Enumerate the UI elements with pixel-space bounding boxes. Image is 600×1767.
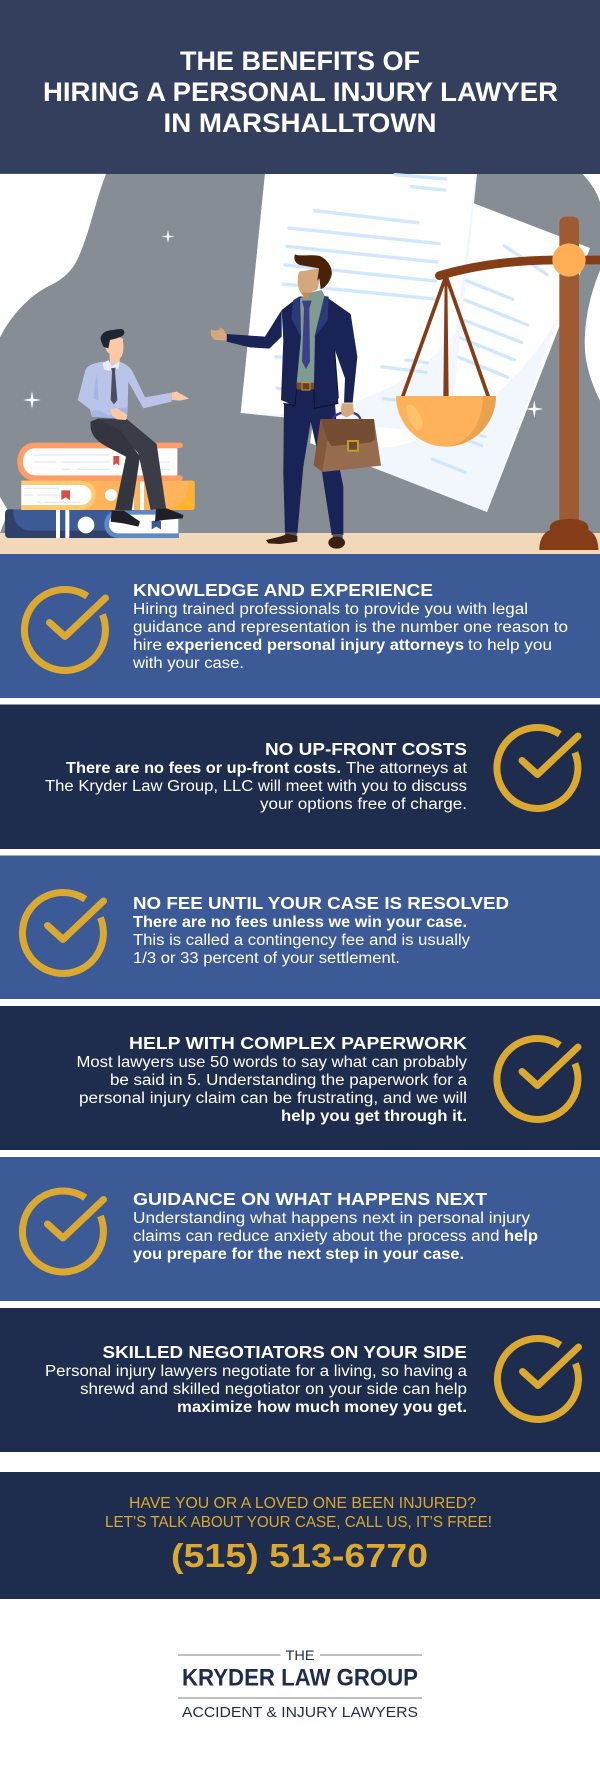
icon: check circle: [497, 1038, 578, 1119]
title: HIRING A PERSONAL INJURY LAWYER: [43, 77, 558, 107]
text block: you prepare for the next step in your case.: [133, 1246, 464, 1263]
icon: check circle: [497, 1338, 578, 1419]
text block: help: [504, 1228, 538, 1245]
text block: [45, 1342, 467, 1416]
call to action panel: [0, 1472, 600, 1599]
text block: The attorneys at: [346, 760, 468, 777]
call to action text: HAVE YOU OR A LOVED ONE BEEN INJURED?: [129, 1495, 476, 1512]
text block: Hiring trained professionals to provide you with legal: [133, 601, 528, 618]
text block: your options free of charge.: [260, 796, 467, 813]
sparkles: [23, 230, 543, 418]
panel: no up-front costs: [0, 704, 600, 849]
text block: experienced personal injury attorneys: [166, 637, 464, 654]
text block: be said in 5. Understanding the paperwork for a: [110, 1072, 467, 1089]
call to action text: LET’S TALK ABOUT YOUR CASE, CALL US, IT’S FREE!: [105, 1514, 492, 1531]
lawyer with briefcase: [211, 254, 381, 549]
text block: to help you: [468, 637, 552, 654]
text block: hire: [133, 637, 162, 654]
text block: There are no fees or up-front costs.: [66, 760, 341, 777]
text block: SKILLED NEGOTIATORS ON YOUR SIDE: [102, 1342, 467, 1362]
logo: The Kryder Law Group: ACCIDENT & INJURY LAWYERS: [182, 1704, 418, 1721]
text block: personal injury claim can be frustrating, and we will: [79, 1090, 467, 1107]
icon: check circle: [22, 1191, 104, 1272]
documents: [241, 174, 590, 512]
phone number: (515) 513-6770: [171, 1537, 428, 1574]
text block: help you get through it.: [281, 1108, 467, 1125]
icon: check circle: [24, 589, 106, 670]
title: [43, 46, 558, 138]
illustration: lawyer, client, books, documents and scale: [0, 174, 600, 554]
text block: KNOWLEDGE AND EXPERIENCE: [133, 580, 433, 600]
seated client: [78, 329, 189, 527]
text block: This is called a contingency fee and is usually: [133, 932, 470, 949]
text block: [133, 1189, 538, 1263]
panel: complex paperwork: [0, 1006, 600, 1150]
call to action text: [105, 1495, 492, 1531]
title: THE BENEFITS OF: [180, 46, 420, 76]
icon: check circle: [497, 727, 578, 808]
text block: Understanding what happens next in personal injury: [133, 1210, 530, 1227]
ground: [0, 533, 600, 554]
icon: check circle: [22, 892, 104, 973]
text block: NO UP-FRONT COSTS: [265, 739, 467, 759]
text block: Most lawyers use 50 words to say what can probably: [76, 1054, 467, 1071]
logo: The Kryder Law Group: [178, 1647, 422, 1721]
text block: claims can reduce anxiety about the process and: [133, 1228, 500, 1245]
text block: [45, 739, 468, 813]
text block: Personal injury lawyers negotiate for a living, so having a: [45, 1363, 467, 1380]
text block: HELP WITH COMPLEX PAPERWORK: [129, 1033, 467, 1053]
title: IN MARSHALLTOWN: [164, 108, 436, 138]
text block: 1/3 or 33 percent of your settlement.: [133, 950, 400, 967]
text block: guidance and representation is the number one reason to: [133, 619, 568, 636]
text block: GUIDANCE ON WHAT HAPPENS NEXT: [133, 1189, 487, 1209]
panel: no fee until resolved: [0, 856, 600, 999]
panel: guidance on what happens next: [0, 1157, 600, 1301]
text block: [76, 1033, 467, 1125]
text block: There are no fees unless we win your case.: [133, 914, 467, 931]
panel: knowledge and experience: [0, 554, 600, 698]
panel: skilled negotiators: [0, 1308, 600, 1452]
header banner with title: [0, 0, 600, 174]
logo: The Kryder Law Group: THE: [286, 1647, 314, 1663]
stack of books: [5, 443, 195, 538]
text block: The Kryder Law Group, LLC will meet with you to discuss: [45, 778, 467, 795]
text block: NO FEE UNTIL YOUR CASE IS RESOLVED: [133, 893, 509, 913]
scale of justice: [396, 217, 600, 550]
text block: with your case.: [132, 655, 244, 672]
text block: maximize how much money you get.: [177, 1399, 467, 1416]
text block: shrewd and skilled negotiator on your side can help: [80, 1381, 467, 1398]
logo: The Kryder Law Group: KRYDER LAW GROUP: [182, 1664, 418, 1692]
text block: [132, 580, 568, 672]
text block: [133, 893, 509, 967]
